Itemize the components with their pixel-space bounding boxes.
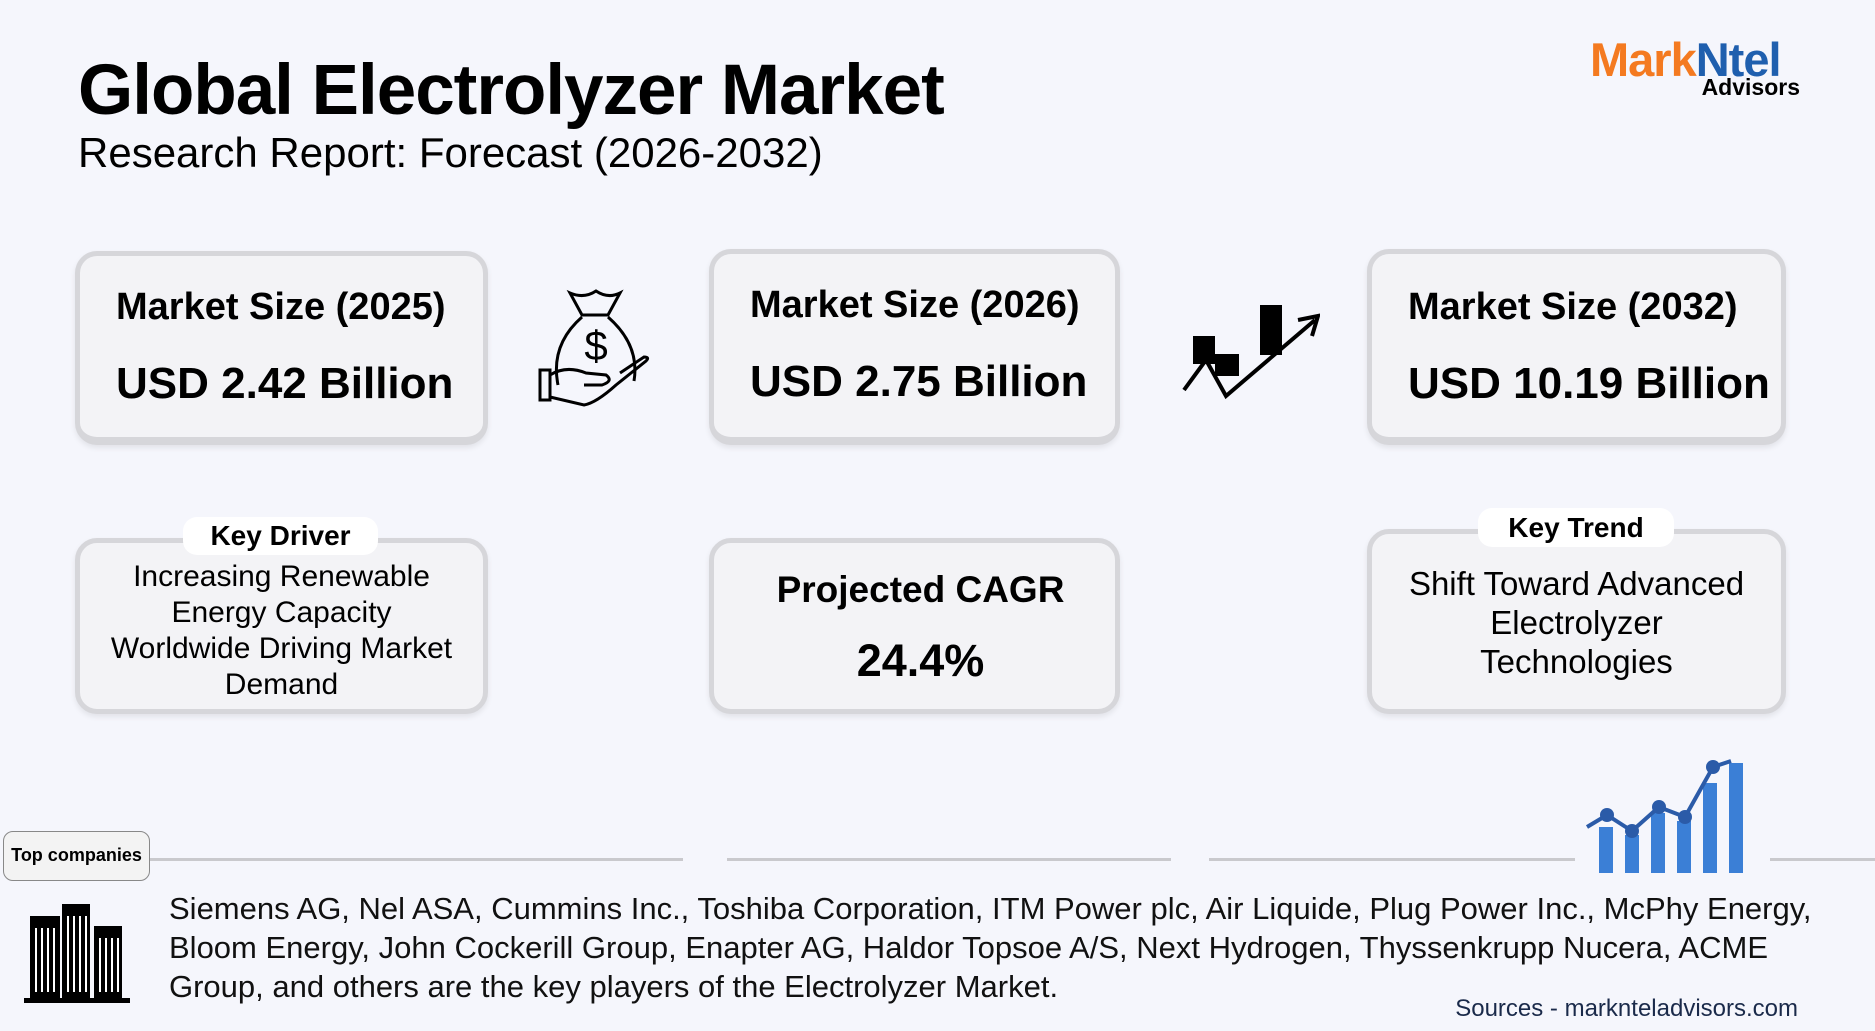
icon: money bag in hand [538,289,650,406]
driver text [111,560,452,701]
companies text: Bloom Energy, John Cockerill Group, Enapter AG, Haldor Topsoe A/S, Next Hydrogen, Thyssenkrupp Nucera, ACME [169,930,1768,965]
companies text [169,891,1812,1004]
icon: money bag in hand: $ [584,322,608,369]
panel: key driver [75,538,488,714]
panel: CAGR: Projected CAGR [777,569,1064,610]
panel: market size 2032: Market Size (2032) [1408,286,1738,328]
panel: market size 2025: USD 2.42 Billion [116,359,453,408]
trend text: Electrolyzer [1490,604,1663,641]
label: top companies [3,831,150,881]
icon: growth chart arrow [1182,305,1320,400]
icon: bar chart [1586,759,1743,873]
trend text: Shift Toward Advanced [1409,565,1744,602]
panel: CAGR [709,538,1120,714]
panel: market size 2025 [75,251,488,445]
label: key driver [183,517,378,555]
panel: market size 2032: USD 10.19 Billion [1408,359,1770,408]
logo: MarkNtel [1590,33,1781,86]
sources: Sources - marknteladvisors.com [1455,995,1798,1022]
driver text: Worldwide Driving Market [111,632,452,665]
trend text [1409,565,1744,680]
driver text: Energy Capacity [171,596,392,629]
panel: market size 2026: USD 2.75 Billion [750,357,1087,406]
driver text: Increasing Renewable [133,560,430,593]
label: key trend: Key Trend [1508,512,1644,543]
logo: Advisors [1702,74,1800,100]
label: key driver: Key Driver [210,520,351,551]
trend text: Technologies [1480,643,1673,680]
panel: CAGR: 24.4% [857,635,984,686]
companies text: Siemens AG, Nel ASA, Cummins Inc., Toshiba Corporation, ITM Power plc, Air Liquide, Plug Power Inc., McPhy Energy, [169,891,1812,926]
panel: market size 2026: Market Size (2026) [750,284,1080,326]
panel: key trend [1367,529,1786,714]
panel: market size 2032 [1367,249,1786,445]
icon: buildings [24,904,130,1003]
companies text: Group, and others are the key players of the Electrolyzer Market. [169,969,1058,1004]
subtitle: Research Report: Forecast (2026-2032) [78,129,823,176]
panel: market size 2025: Market Size (2025) [116,286,446,328]
title: Global Electrolyzer Market [78,51,944,130]
driver text: Demand [225,668,338,701]
label: top companies: Top companies [11,845,142,865]
panel: market size 2026 [709,249,1120,445]
label: key trend [1478,508,1674,547]
